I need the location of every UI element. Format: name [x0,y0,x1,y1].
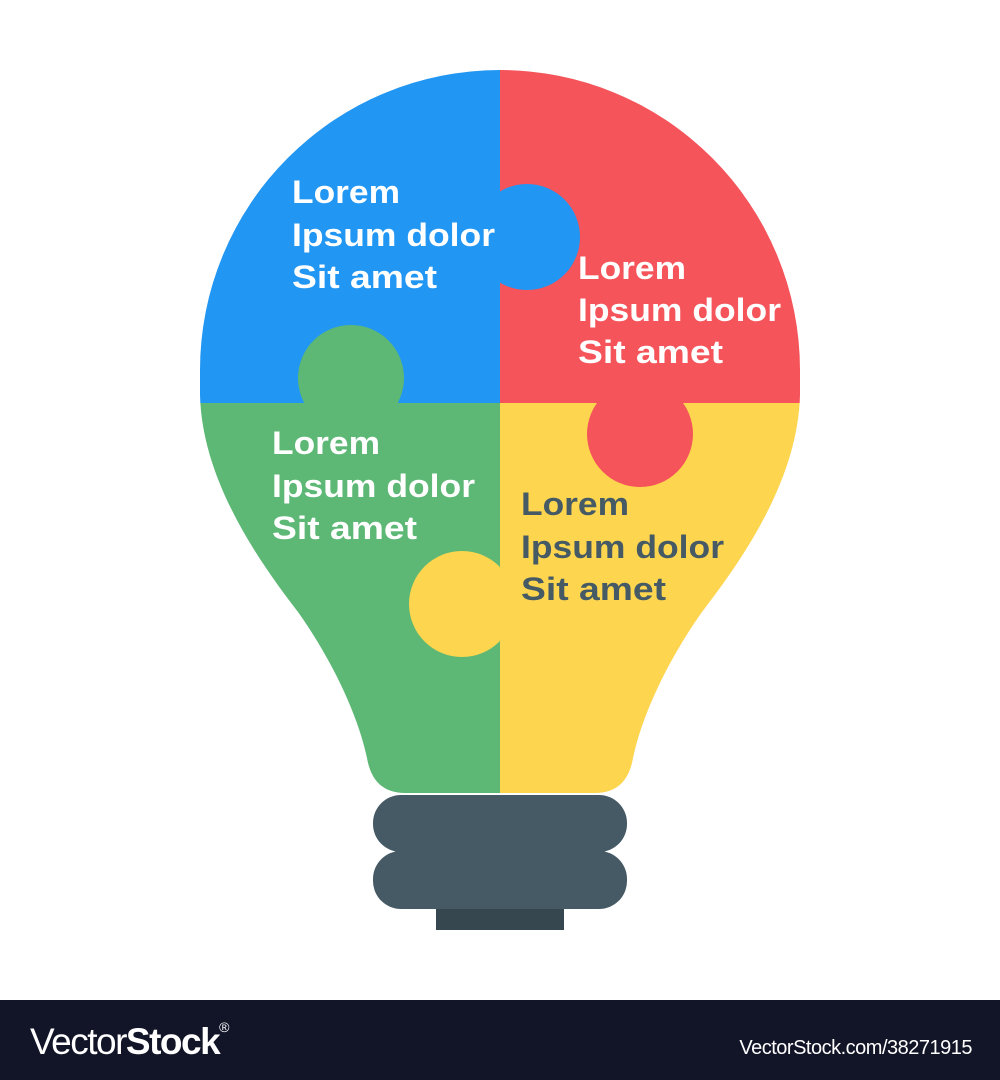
text: blue piece: Lorem [292,174,400,210]
text: red piece: Lorem [578,250,686,286]
text: green piece: Sit amet [272,510,417,546]
text: green piece: Lorem [272,425,380,461]
text: red piece: Sit amet [578,334,723,370]
footer logo: ® [219,1019,230,1035]
text: yellow piece: Lorem [521,486,629,522]
text: red piece [578,250,781,370]
puzzle piece: blue [200,70,500,403]
knob: yellow [409,551,500,657]
text: yellow piece: Sit amet [521,571,666,607]
bulb base [373,795,627,930]
text: green piece: Ipsum dolor [272,468,475,504]
text: yellow piece [521,486,724,607]
text: blue piece: Ipsum dolor [292,217,495,253]
text: blue piece [292,174,495,295]
footer logo: VectorStock [30,1021,219,1062]
knob: green [298,325,404,403]
text: yellow piece: Ipsum dolor [521,529,724,565]
footer bar [0,1000,1000,1080]
puzzle piece: green [200,403,500,793]
text: blue piece: Sit amet [292,259,437,295]
puzzle piece: red [500,70,800,403]
footer url: VectorStock.com/38271915 [739,1037,972,1059]
bulb glass puzzle [200,70,800,793]
text: green piece [272,425,475,546]
knob: red [587,403,693,487]
puzzle piece: yellow [500,403,800,793]
text: red piece: Ipsum dolor [578,292,781,328]
knob: blue [500,184,580,290]
